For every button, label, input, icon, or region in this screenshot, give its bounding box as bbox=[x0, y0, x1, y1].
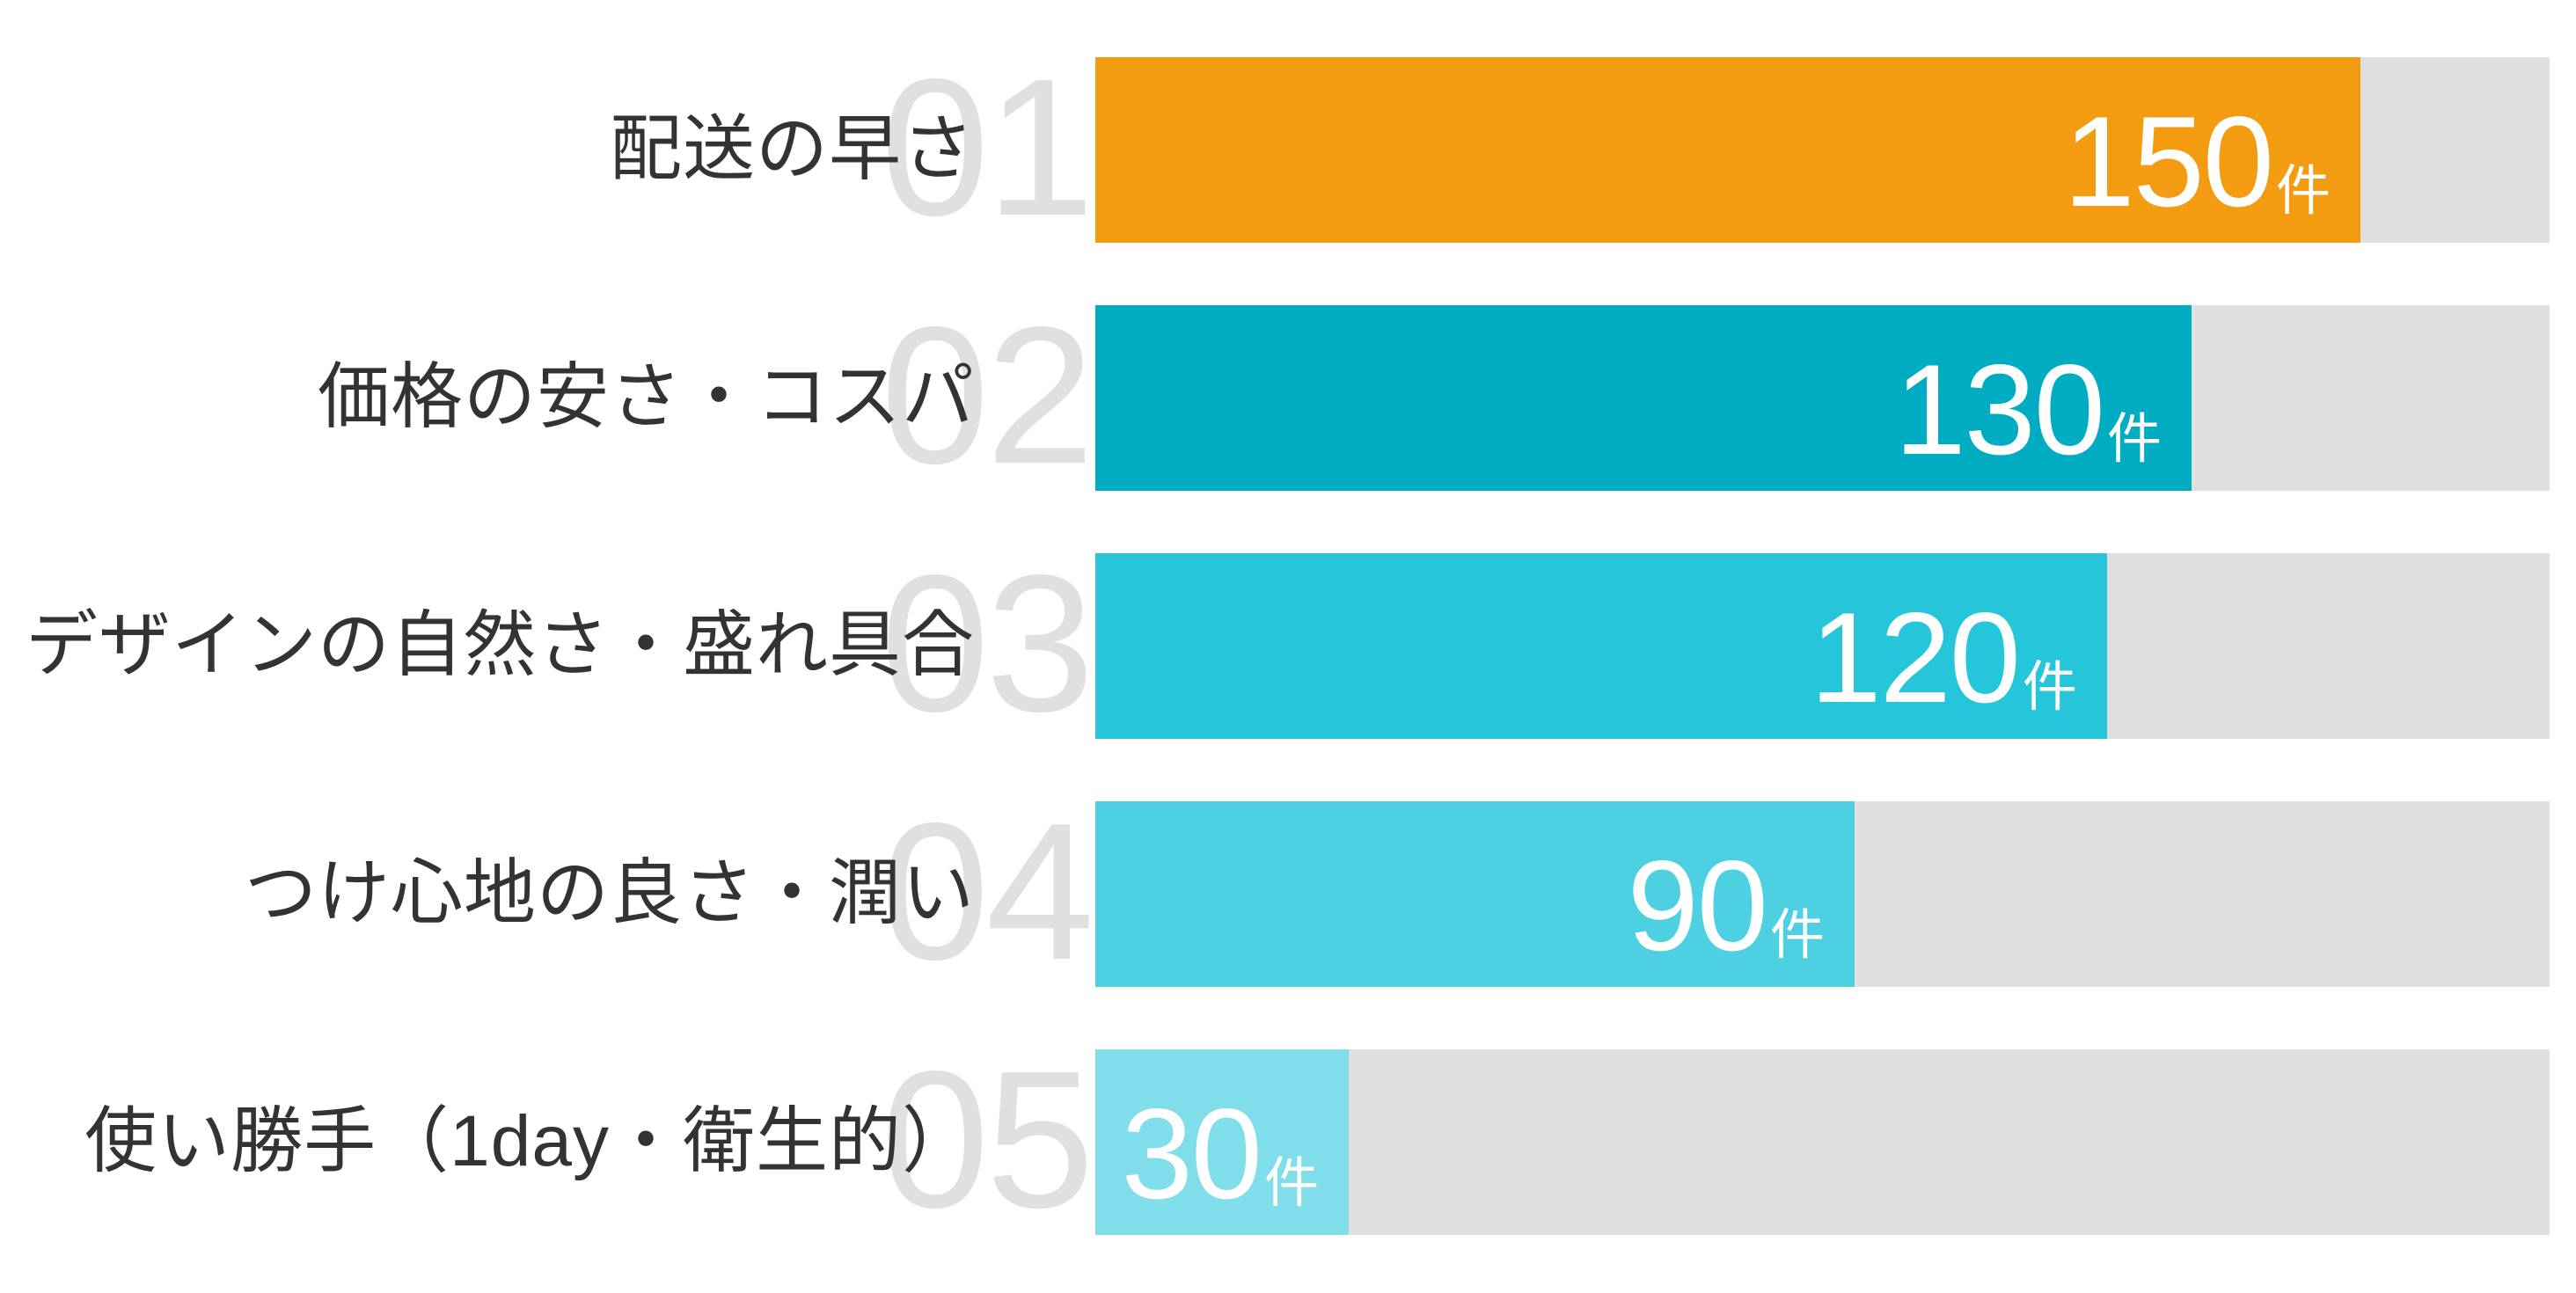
bar 2 bbox=[1095, 305, 2192, 491]
index 01: 01 bbox=[881, 39, 1091, 257]
label 4: つけ心地の良さ・潤い bbox=[245, 853, 975, 933]
bar 5: 件 bbox=[1264, 1153, 1319, 1214]
row 5: 使い勝手 bbox=[84, 1031, 2550, 1249]
bar 4: 件 bbox=[1770, 905, 1825, 966]
bar 4: 90 bbox=[1628, 834, 1767, 977]
bar 3 bbox=[1095, 553, 2107, 739]
row 4: つけ心地 bbox=[245, 783, 2550, 1001]
index 02: 02 bbox=[881, 287, 1091, 505]
bar 5: 30 bbox=[1122, 1082, 1261, 1225]
index 04: 04 bbox=[881, 783, 1091, 1001]
label 5: 使い勝手（1day・衛生的） bbox=[84, 1101, 975, 1181]
bar 1 bbox=[1095, 57, 2360, 243]
row 1: 配送の早さ bbox=[610, 39, 2550, 257]
bar 3: 120 bbox=[1810, 586, 2019, 729]
bar 5 bbox=[1095, 1049, 1349, 1235]
label 2: 価格の安さ・コスパ bbox=[318, 357, 975, 437]
bar 1: 150 bbox=[2063, 90, 2272, 233]
index 03: 03 bbox=[881, 535, 1091, 753]
label 3: デザインの自然さ・盛れ具合 bbox=[26, 605, 975, 685]
bar 3: 件 bbox=[2023, 657, 2077, 718]
index 05: 05 bbox=[881, 1031, 1091, 1249]
bar 2: 件 bbox=[2107, 409, 2162, 470]
label 1: 配送の早さ bbox=[610, 109, 975, 189]
bar 1: 件 bbox=[2276, 161, 2331, 222]
row 2: 価格 bbox=[318, 287, 2550, 505]
bar 4 bbox=[1095, 801, 1855, 987]
row 3: デザイン bbox=[26, 535, 2550, 753]
bar 2: 130 bbox=[1894, 338, 2104, 481]
